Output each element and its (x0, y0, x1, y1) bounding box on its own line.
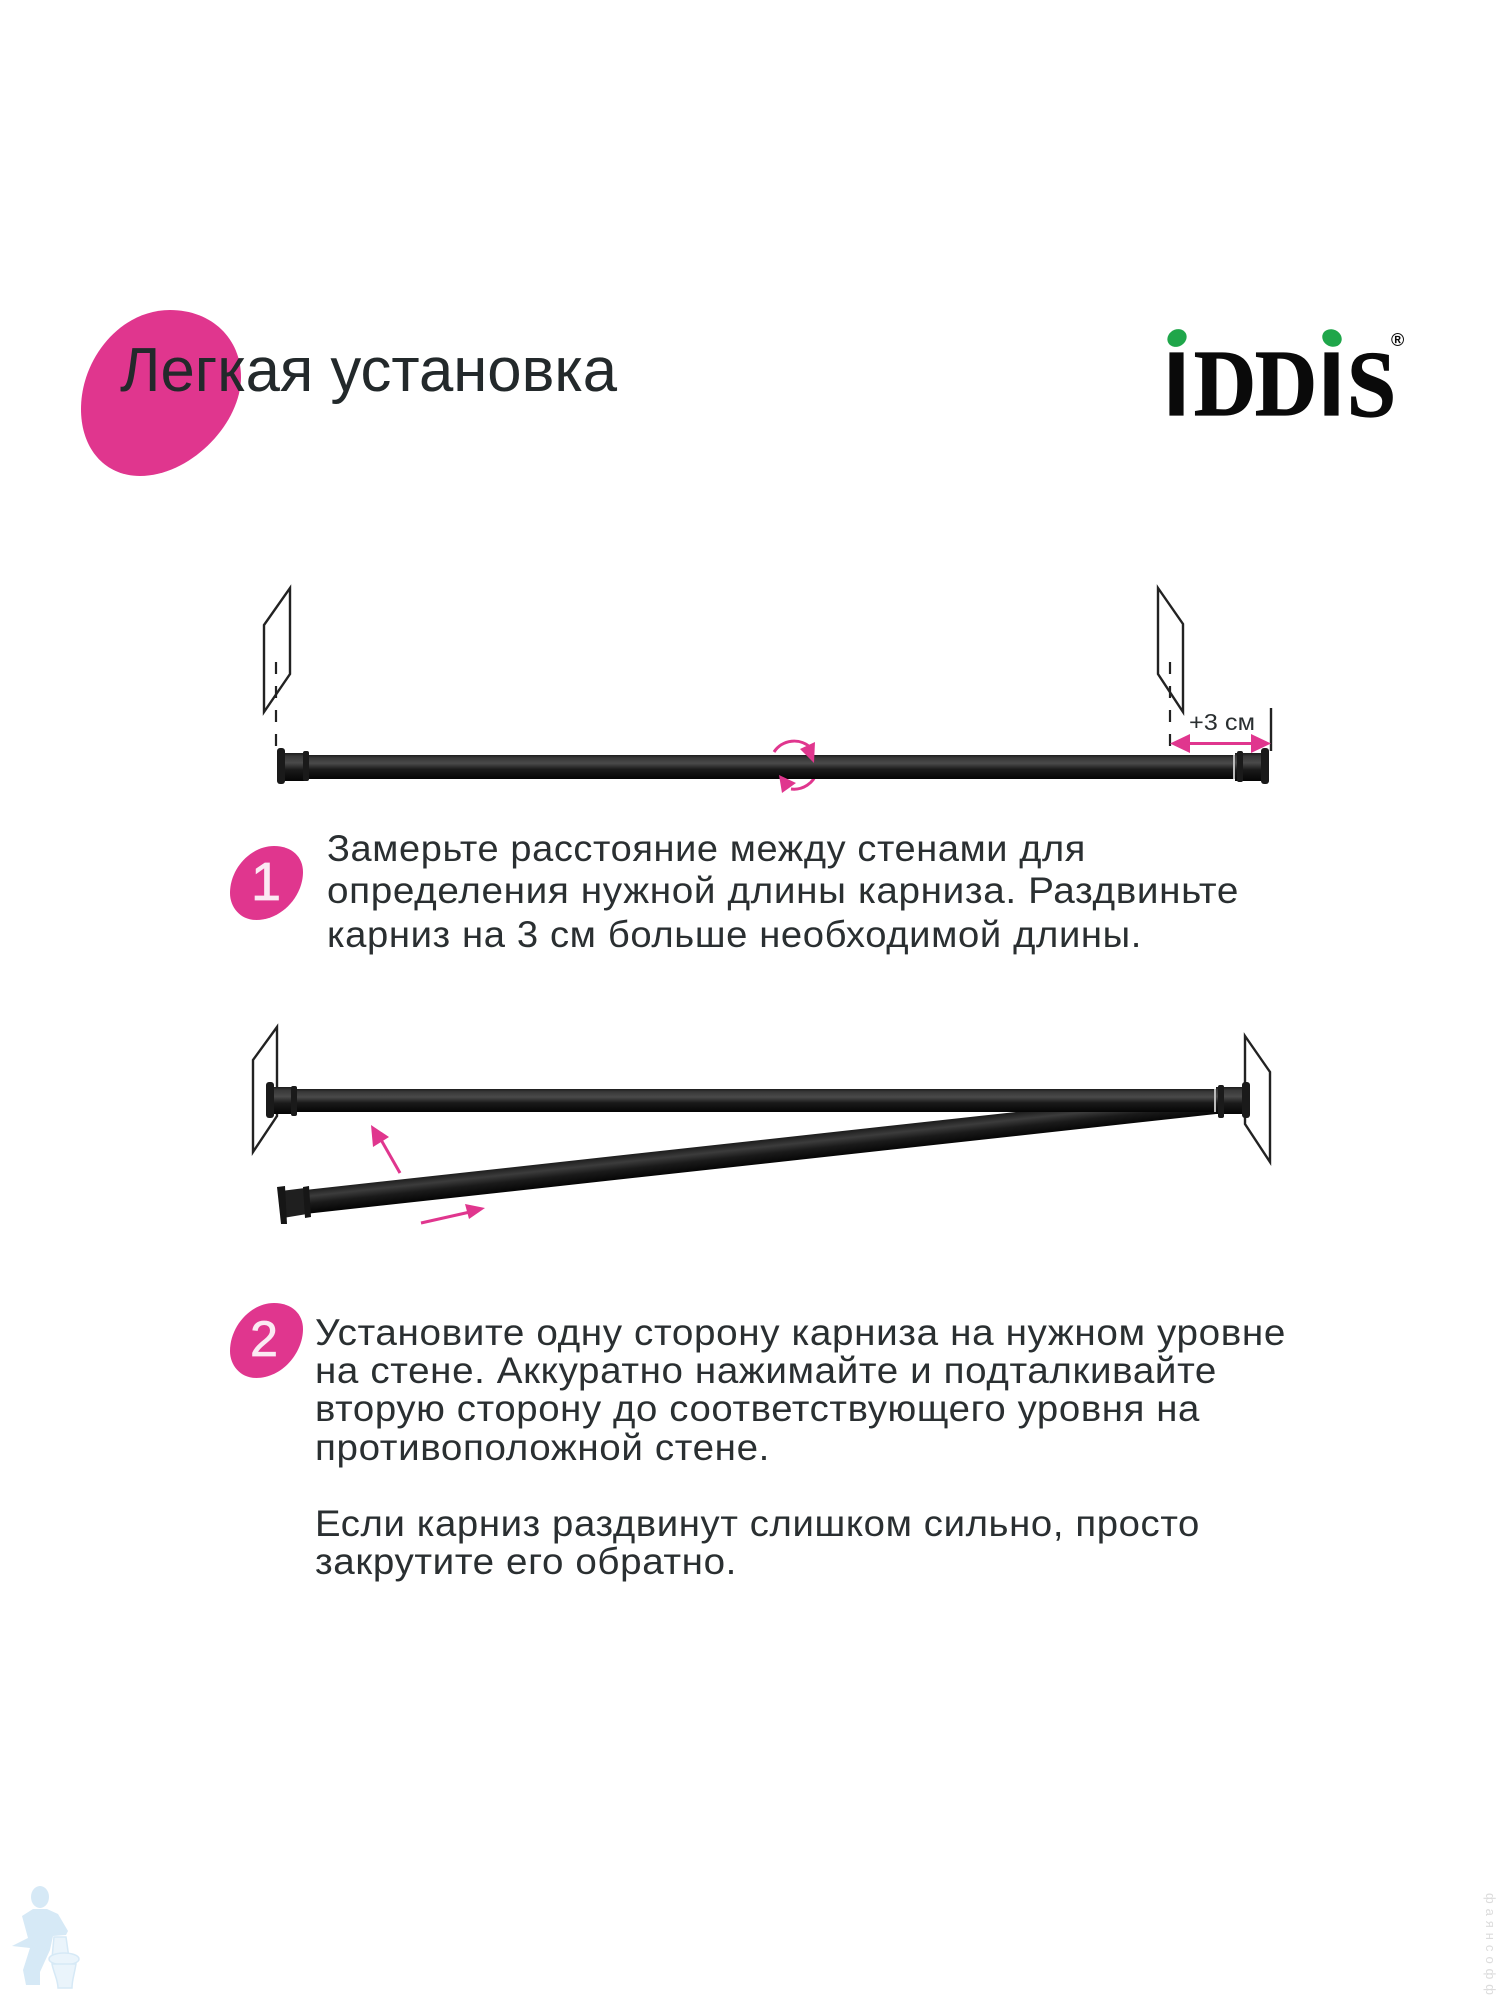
logo wordmark (1164, 332, 1396, 437)
step 2 text: противоположной стене. (315, 1427, 770, 1468)
right wall (1245, 1036, 1270, 1162)
left wall (264, 588, 290, 712)
horizontal rod (266, 1082, 1250, 1118)
diagram 2: rod installation (253, 1027, 1270, 1224)
arrow up-left (371, 1125, 400, 1173)
step 1 text: Замерьте расстояние между стенами для (327, 828, 1086, 869)
step 2 text: Если карниз раздвинут слишком сильно, просто (315, 1503, 1200, 1544)
logo wordmark: D (1194, 332, 1256, 436)
title: Легкая установка (120, 336, 618, 405)
logo wordmark: I (1319, 335, 1344, 435)
rotation arrow heads (779, 742, 815, 793)
watermark: vertical site label: фаянсофф (1483, 1893, 1498, 1995)
logo: IDDIS (1164, 326, 1404, 437)
arrow right (421, 1204, 485, 1223)
limit tick (1270, 708, 1272, 751)
plumber figure (12, 1886, 68, 1985)
pink blob behind title (81, 310, 241, 476)
step 1 text (327, 828, 1239, 955)
step 1 badge: 1 (251, 852, 281, 912)
step 2 text: Установите одну сторону карниза на нужном уровне (315, 1312, 1286, 1353)
tilted rod (277, 1090, 1216, 1224)
step 1 badge (230, 846, 303, 920)
logo wordmark: I (1164, 335, 1189, 435)
logo dots (1164, 326, 1345, 350)
logo wordmark: S (1347, 333, 1396, 437)
rotation arrow arcs (774, 741, 817, 789)
step 2 badge: 2 (250, 1311, 278, 1367)
step 1 text: карниз на 3 см больше необходимой длины. (327, 914, 1142, 955)
toilet (49, 1937, 79, 1988)
logo wordmark: D (1255, 332, 1317, 436)
watermark: plumber icon (12, 1886, 79, 1988)
left wall (253, 1027, 277, 1152)
right wall (1158, 588, 1183, 712)
registered mark: ® (1391, 330, 1404, 350)
measurement label: +3 см (1189, 709, 1255, 735)
step 1 text: определения нужной длины карниза. Раздвиньте (327, 870, 1239, 911)
dashed guides (276, 662, 1170, 757)
step 2 text: на стене. Аккуратно нажимайте и подталкивайте (315, 1350, 1217, 1391)
measurement arrow (1170, 734, 1271, 753)
step 2 text: закрутите его обратно. (315, 1541, 737, 1582)
step 2 text (315, 1312, 1286, 1582)
rod (277, 748, 1269, 784)
step 2 badge (230, 1303, 303, 1378)
step 2 text: вторую сторону до соответствующего уровня на (315, 1388, 1200, 1429)
diagram 1: rod measuring (264, 588, 1271, 793)
